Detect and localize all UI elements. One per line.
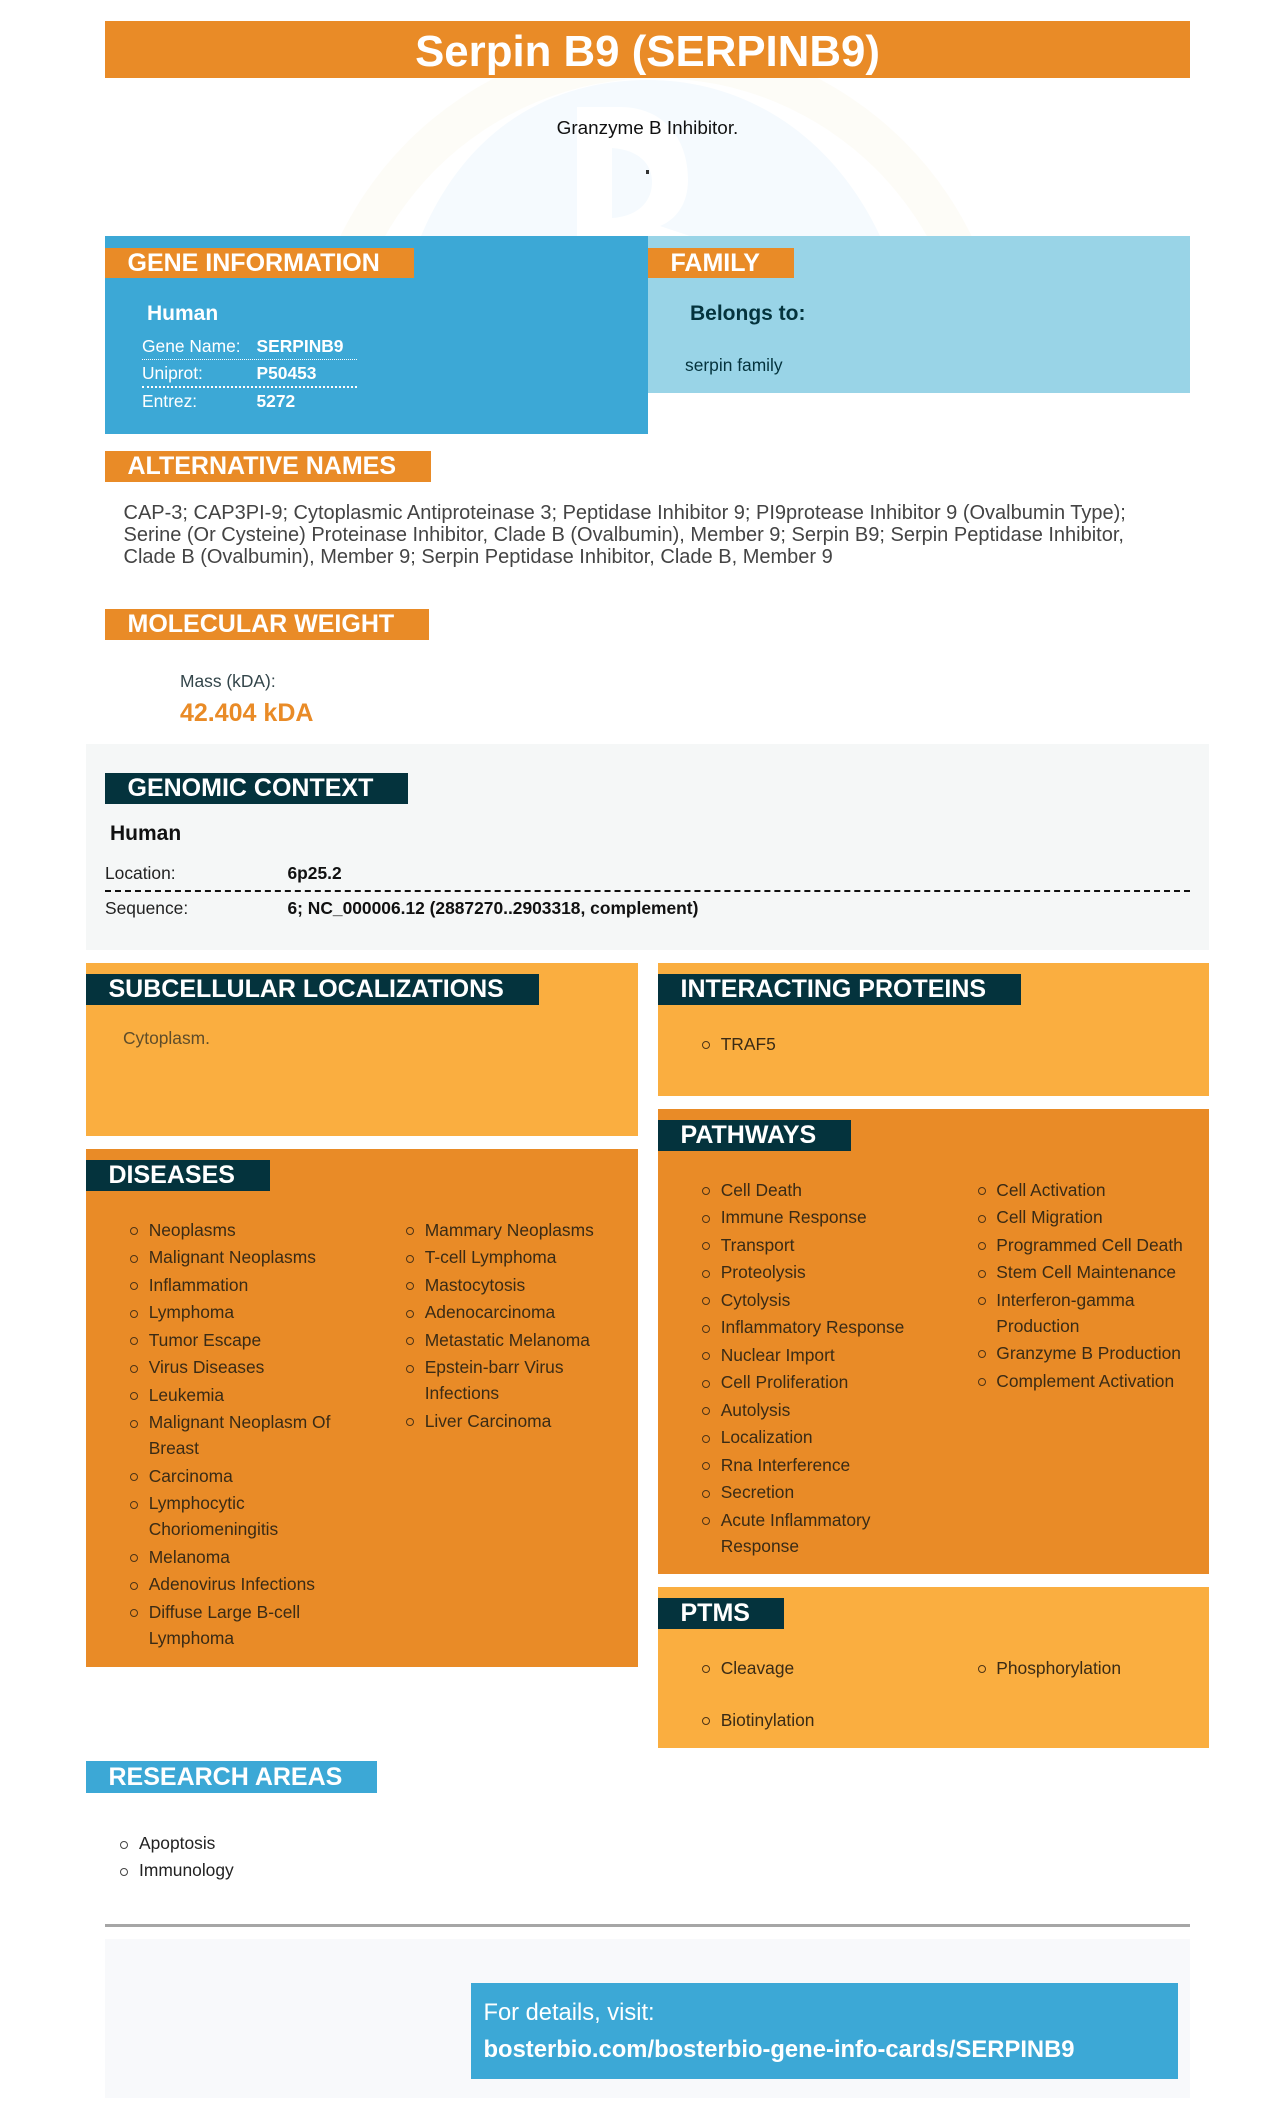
list: diseases column 1: Virus Diseases (149, 1357, 264, 1377)
list: diseases column 1: Leukemia (149, 1384, 224, 1404)
uniprot row (142, 363, 357, 388)
species label: Human (110, 822, 181, 844)
title banner: Serpin B9 (SERPINB9) (415, 27, 880, 76)
heading: diseases (86, 1160, 270, 1191)
callout: details link (471, 1983, 1178, 2079)
list: pathways column 1: Transport (721, 1234, 794, 1254)
panel: genomic context (86, 744, 1209, 950)
list: diseases column 1: Diffuse Large B-cell (149, 1602, 300, 1622)
watermark logo (422, 80, 880, 236)
heading: ptms: PTMS (680, 1599, 750, 1627)
heading: genomic context: GENOMIC CONTEXT (128, 774, 373, 802)
list: diseases column 1: Inflammation (149, 1274, 248, 1294)
list: ptms: Biotinylation (721, 1710, 814, 1730)
panel: interacting proteins (658, 963, 1209, 1096)
list: pathways column 1: Rna Interference (721, 1454, 850, 1474)
panel: diseases (86, 1149, 638, 1667)
text: alternative names: CAP-3; CAP3PI-9; Cytoplasmic Antiproteinase 3; Peptidase Inhibitor 9; PI9protease Inhibitor 9 (Ovalbumin Type); (124, 502, 1126, 524)
list: pathways column 1: Response (721, 1536, 799, 1556)
uniprot row: P50453 (256, 363, 316, 383)
list: diseases column 1: Breast (149, 1438, 199, 1458)
panel: family (648, 236, 1190, 393)
heading: alternative names: ALTERNATIVE NAMES (128, 452, 396, 480)
list: diseases column 2 (406, 1220, 594, 1430)
list: pathways column 1: Acute Inflammatory (721, 1510, 870, 1530)
heading: molecular weight: MOLECULAR WEIGHT (128, 610, 394, 638)
list: pathways column 1 (702, 1180, 904, 1556)
belongs to label: Belongs to: (690, 302, 806, 325)
subtitle dot (646, 170, 648, 174)
gene name row: Gene Name: (142, 336, 241, 356)
heading: diseases: DISEASES (108, 1161, 235, 1189)
heading: interacting proteins: INTERACTING PROTEINS (680, 975, 986, 1003)
list: diseases column 2: Infections (425, 1383, 499, 1403)
mass label: Mass (kDA): (180, 671, 276, 691)
list: diseases column 2: Adenocarcinoma (425, 1302, 555, 1322)
list: diseases column 2: Epstein-barr Virus (425, 1357, 564, 1377)
list: pathways column 1: Inflammatory Response (721, 1317, 904, 1337)
text: alternative names: Clade B (Ovalbumin), Member 9; Serpin Peptidase Inhibitor, Clade B, Member 9 (124, 546, 833, 568)
list: pathways column 1: Cell Proliferation (721, 1372, 848, 1392)
list: diseases column 1: Choriomeningitis (149, 1519, 278, 1539)
list: pathways column 2: Stem Cell Maintenance (996, 1262, 1176, 1282)
sequence row (105, 898, 698, 918)
list: diseases column 1: Malignant Neoplasms (149, 1247, 316, 1267)
text: alternative names (124, 502, 1126, 568)
heading: family (648, 248, 794, 278)
list: research areas: Apoptosis (139, 1833, 215, 1853)
text: cytoplasm: Cytoplasm. (123, 1028, 210, 1048)
list: diseases column 2: Metastatic Melanoma (425, 1330, 590, 1350)
heading: research areas: RESEARCH AREAS (108, 1763, 342, 1791)
text: alternative names: Serine (Or Cysteine) Proteinase Inhibitor, Clade B (Ovalbumin), Member 9; Serpin B9; Serpin Peptidase Inhibitor, (124, 524, 1124, 546)
list: pathways column 1: Proteolysis (721, 1262, 806, 1282)
list: ptms (702, 1658, 1121, 1730)
family value: serpin family (685, 354, 783, 374)
entrez row (142, 391, 295, 411)
callout link: bosterbio.com/bosterbio-gene-info-cards/SERPINB9 (484, 2036, 1075, 2063)
list: diseases column 2: Liver Carcinoma (425, 1410, 551, 1430)
list: pathways column 1: Secretion (721, 1482, 794, 1502)
panel: footer (105, 1939, 1190, 2098)
sequence row: Sequence: (105, 898, 188, 918)
list: research areas (120, 1833, 234, 1880)
list: pathways column 2: Interferon-gamma (996, 1290, 1135, 1310)
subtitle: Granzyme B Inhibitor. (557, 118, 738, 139)
list: pathways column 1: Localization (721, 1427, 813, 1447)
list: diseases column 1: Malignant Neoplasm Of (149, 1412, 330, 1432)
heading: subcellular localizations: SUBCELLULAR LOCALIZATIONS (108, 975, 504, 1003)
heading: pathways (658, 1120, 851, 1151)
list: diseases column 2: T-cell Lymphoma (425, 1247, 556, 1267)
list: pathways column 1: Nuclear Import (721, 1344, 835, 1364)
list: pathways column 2: Production (996, 1316, 1079, 1336)
list: diseases column 1: Lymphoma (149, 1302, 234, 1322)
heading: gene information: GENE INFORMATION (128, 249, 380, 277)
mass value: 42.404 kDA (180, 699, 313, 727)
callout text: For details, visit: (484, 2000, 655, 2026)
list: pathways column 2: Complement Activation (996, 1370, 1174, 1390)
gene name row: SERPINB9 (256, 336, 343, 356)
list: diseases column 1: Tumor Escape (149, 1330, 261, 1350)
list: pathways column 2: Cell Activation (996, 1180, 1106, 1200)
list: diseases column 1 (130, 1220, 330, 1648)
list: diseases column 1: Lymphocytic (149, 1493, 245, 1513)
panel: pathways (658, 1109, 1209, 1574)
uniprot row: Uniprot: (142, 363, 203, 383)
heading: pathways: PATHWAYS (680, 1121, 816, 1149)
heading: ptms (658, 1598, 784, 1629)
list: pathways column 2: Granzyme B Production (996, 1342, 1181, 1362)
location row: Location: (105, 863, 176, 883)
list: diseases column 1: Melanoma (149, 1546, 230, 1566)
title banner (105, 21, 1190, 78)
list: diseases column 1: Adenovirus Infections (149, 1574, 315, 1594)
list: research areas: Immunology (139, 1860, 234, 1880)
list: pathways column 1: Cytolysis (721, 1290, 790, 1310)
list: diseases column 1: Lymphoma (149, 1628, 234, 1648)
entrez row: 5272 (256, 391, 295, 411)
list: pathways column 1: Autolysis (721, 1400, 790, 1420)
panel: gene information (105, 236, 648, 434)
location row: 6p25.2 (288, 863, 342, 883)
list: diseases column 2: Mastocytosis (425, 1274, 525, 1294)
sequence row: 6; NC_000006.12 (2887270..2903318, complement) (288, 898, 698, 918)
list: pathways column 2 (978, 1180, 1183, 1390)
entrez row: Entrez: (142, 391, 197, 411)
list: pathways column 1: Immune Response (721, 1207, 867, 1227)
location row (105, 863, 342, 883)
list: pathways column 2: Programmed Cell Death (996, 1234, 1183, 1254)
list: diseases column 1: Carcinoma (149, 1466, 233, 1486)
list: diseases column 2: Mammary Neoplasms (425, 1220, 594, 1240)
species label: Human (147, 302, 218, 325)
gene name row (142, 336, 357, 360)
list: ptms: Cleavage (721, 1658, 794, 1678)
list: pathways column 1: Cell Death (721, 1180, 802, 1200)
panel: ptms (658, 1587, 1209, 1748)
list: pathways column 2: Cell Migration (996, 1207, 1103, 1227)
heading: family: FAMILY (670, 249, 760, 277)
list: interacting proteins: TRAF5 (721, 1034, 776, 1054)
list: diseases column 1: Neoplasms (149, 1220, 236, 1240)
panel: subcellular localizations (86, 963, 638, 1136)
list: ptms: Phosphorylation (996, 1658, 1121, 1678)
